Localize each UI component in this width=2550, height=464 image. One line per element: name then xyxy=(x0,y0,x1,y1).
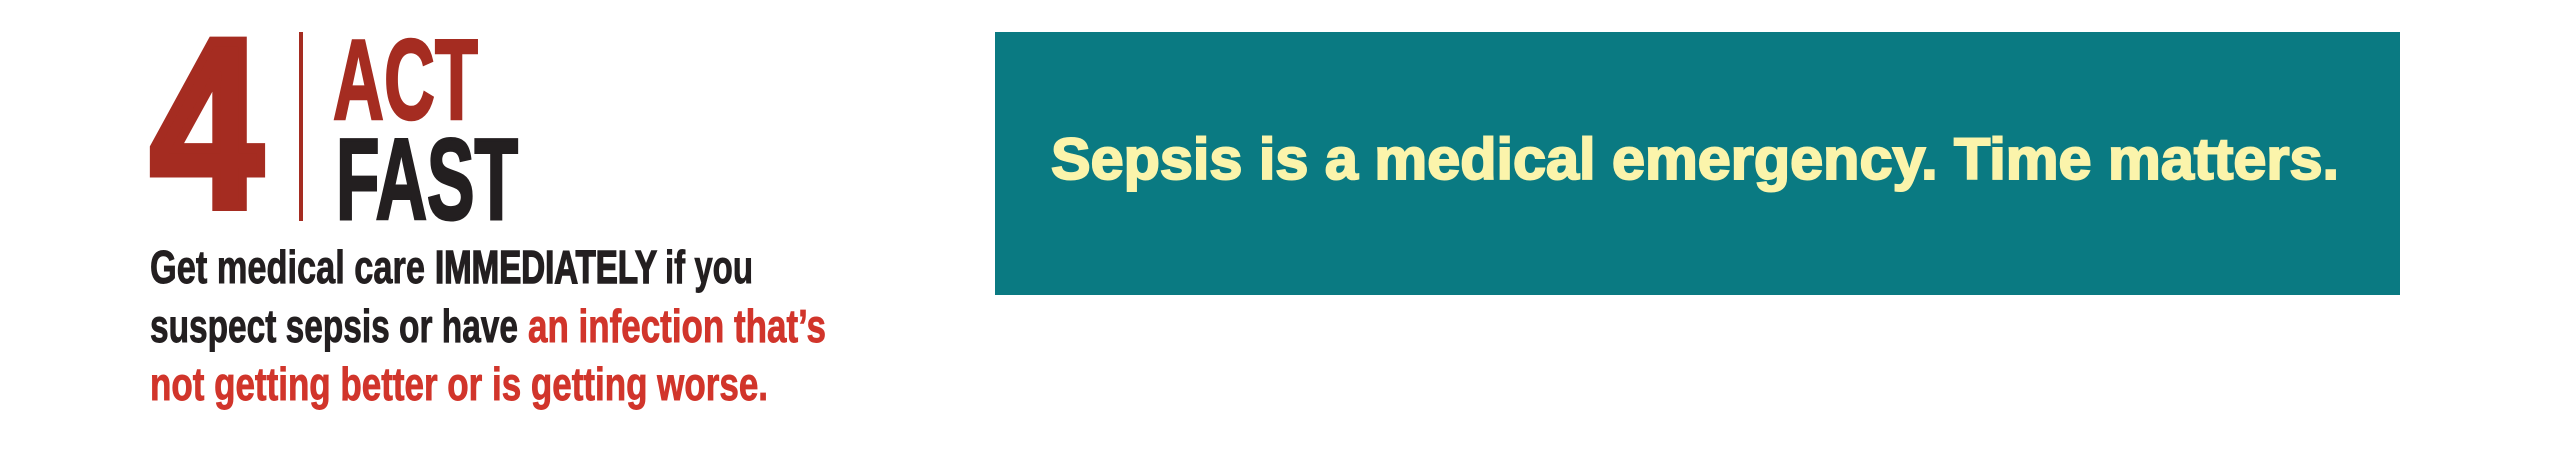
body text: not getting better or is getting worse. xyxy=(150,358,768,410)
vertical divider xyxy=(299,32,303,221)
panel message: Sepsis is a medical emergency. Time matters. xyxy=(1051,127,2339,192)
heading: act: ACT xyxy=(333,17,478,144)
body text: if you xyxy=(665,241,753,293)
body text: Get medical care xyxy=(150,241,425,293)
body text: IMMEDIATELY xyxy=(435,241,657,293)
body text: an infection that’s xyxy=(528,300,826,352)
body text: suspect sepsis or have xyxy=(150,300,518,352)
body text xyxy=(150,241,826,410)
panel background xyxy=(995,32,2400,295)
heading: fast: FAST xyxy=(336,116,518,244)
